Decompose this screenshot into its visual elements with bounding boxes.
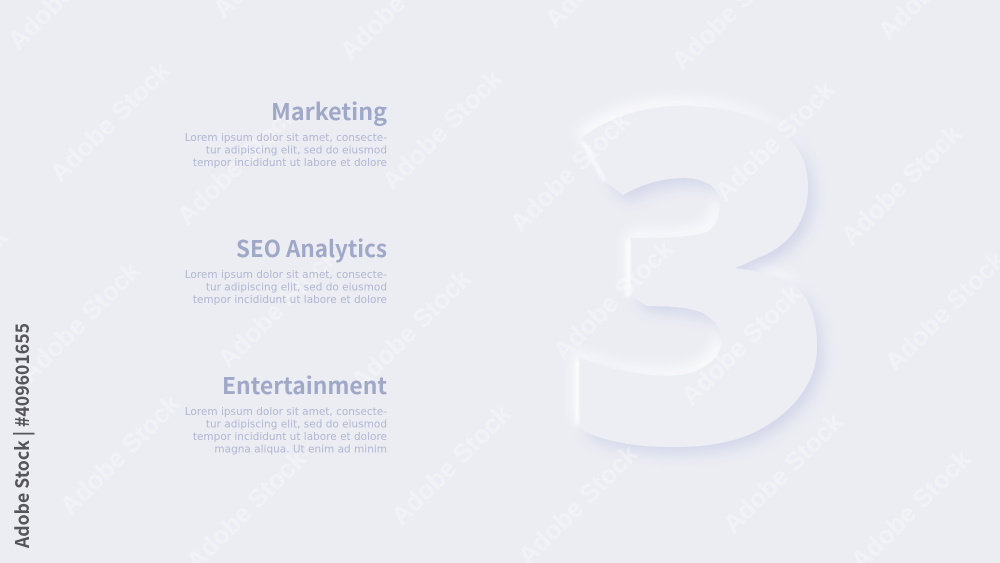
watermarks: Adobe Stock	[55, 389, 186, 521]
text block: Marketing	[185, 93, 387, 169]
body: Marketing	[185, 132, 387, 169]
watermarks: Adobe Stock	[45, 56, 176, 188]
body: SEO Analytics	[185, 269, 387, 306]
body: Entertainment	[185, 406, 387, 456]
body: SEO Analytics: Lorem ipsum dolor sit amet, consecte-	[185, 269, 387, 281]
watermarks: Adobe Stock	[377, 64, 508, 196]
body: Marketing: tur adipiscing elit, sed do eiusmod	[206, 144, 387, 156]
text block: SEO Analytics	[185, 230, 387, 306]
body: SEO Analytics: tempor incididunt ut labore et dolore	[193, 294, 387, 306]
watermarks: Adobe Stock	[213, 242, 344, 374]
watermarks: Adobe Stock	[548, 234, 679, 366]
watermarks: Adobe Stock	[718, 407, 849, 539]
body: Entertainment: magna aliqua. Ut enim ad minim	[214, 444, 387, 456]
watermarks: Adobe Stock	[346, 264, 477, 396]
watermarks: Adobe Stock	[172, 99, 303, 231]
stock id label: Adobe Stock | #409601655	[8, 323, 35, 549]
body: Marketing: tempor incididunt ut labore et dolore	[193, 157, 387, 169]
heading: SEO Analytics: SEO Analytics	[236, 230, 387, 264]
body: Marketing: Lorem ipsum dolor sit amet, consecte-	[185, 132, 387, 144]
text block: Entertainment	[185, 367, 387, 456]
watermarks: Adobe Stock	[505, 106, 636, 238]
watermarks: Adobe Stock	[836, 119, 967, 251]
watermarks: Adobe Stock	[386, 399, 517, 531]
watermarks: Adobe Stock	[15, 256, 146, 388]
big neumorphic number 3	[577, 106, 817, 447]
body: Entertainment: Lorem ipsum dolor sit amet, consecte-	[185, 406, 387, 418]
watermarks: Adobe Stock	[710, 75, 841, 207]
heading: Marketing: Marketing	[271, 93, 387, 127]
body: SEO Analytics: tur adipiscing elit, sed do eiusmod	[206, 282, 387, 294]
heading: Entertainment: Entertainment	[222, 367, 387, 401]
body: Entertainment: tempor incididunt ut labore et dolore	[193, 431, 387, 443]
body: Entertainment: tur adipiscing elit, sed do eiusmod	[206, 418, 387, 430]
watermarks: Adobe Stock	[676, 279, 807, 411]
